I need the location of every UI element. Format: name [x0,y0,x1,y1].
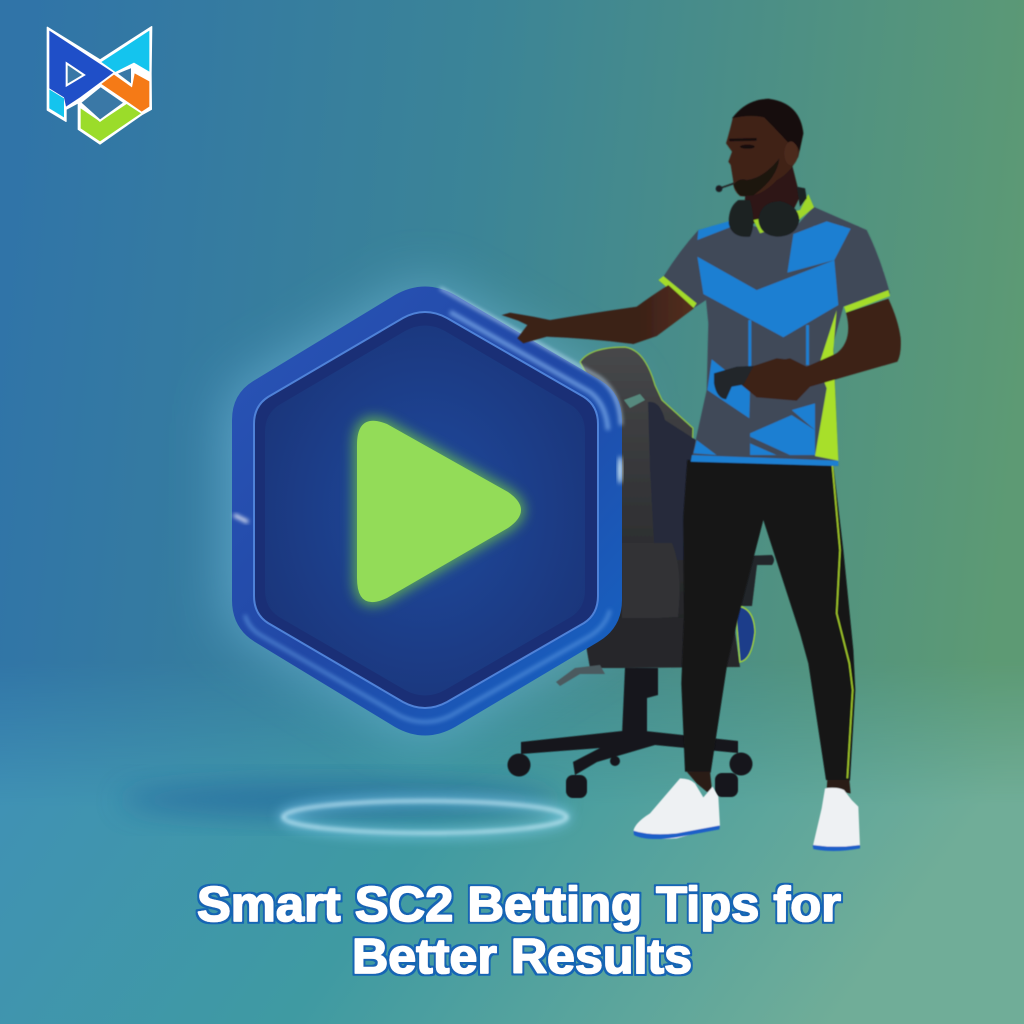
right shoe [813,788,860,851]
hexagon upper inner highlight [450,312,608,430]
chair base [521,731,738,775]
mic boom [716,183,734,192]
chair seat [585,618,740,668]
left sleeve cuff [658,276,697,309]
chair seat side [735,606,755,662]
chair back [580,347,693,620]
brow [729,135,757,144]
chair casters [508,752,752,798]
chair recline lever [556,665,605,686]
hexagon top right highlight [440,288,621,425]
collar [753,194,814,233]
chair headrest opening [624,394,645,408]
person [502,99,901,851]
left arm [502,285,694,344]
logo: green band [81,104,141,141]
hexagon inner groove [254,312,598,708]
logo: play cutout right [116,67,132,85]
hexagon left highlight [234,515,248,522]
eye [740,145,755,149]
headphones [729,187,807,237]
hexagon right spark [618,456,622,484]
play glow [357,421,521,602]
logo: inner diamond [80,86,125,121]
logo: cyan wing [101,31,149,72]
left shoe [633,778,720,839]
ankles [687,772,851,797]
title line 1: Smart SC2 Betting Tips for [197,878,841,932]
right arm [742,299,901,401]
gaming chair [508,347,774,798]
glowing floor ring [283,800,567,834]
title line 2: Better Results [352,930,692,984]
logo: blue P [49,31,113,107]
beard [733,158,779,196]
hexagon outer rim [232,286,622,736]
head [726,99,803,196]
logo [47,27,152,144]
logo: orange band [101,73,149,112]
fingers [743,358,792,388]
title [197,878,841,984]
play triangle [357,421,521,602]
jersey lime side [815,310,838,461]
jersey blue panels [691,221,851,466]
chair column [622,668,658,735]
jersey grey stripe [750,437,790,455]
pants [681,460,855,781]
logo: white outline [47,27,152,144]
neck [743,157,800,223]
logo: cyan foot [49,89,64,117]
game controller [714,365,776,399]
hexagon play badge [232,286,622,736]
hexagon face [265,326,585,696]
pants lime piping [832,465,853,778]
chair lumbar cushion [622,543,680,620]
chair armrest [740,555,774,606]
hexagon glow [245,300,605,720]
jersey [658,207,890,466]
chair side wing [648,402,696,560]
upper body [502,99,901,466]
ear [784,141,798,165]
hair [732,99,803,152]
right sleeve cuff [844,290,890,313]
floor shadow [120,782,560,818]
hexagon lower highlight [245,610,610,722]
logo: play cutout left [67,63,84,85]
